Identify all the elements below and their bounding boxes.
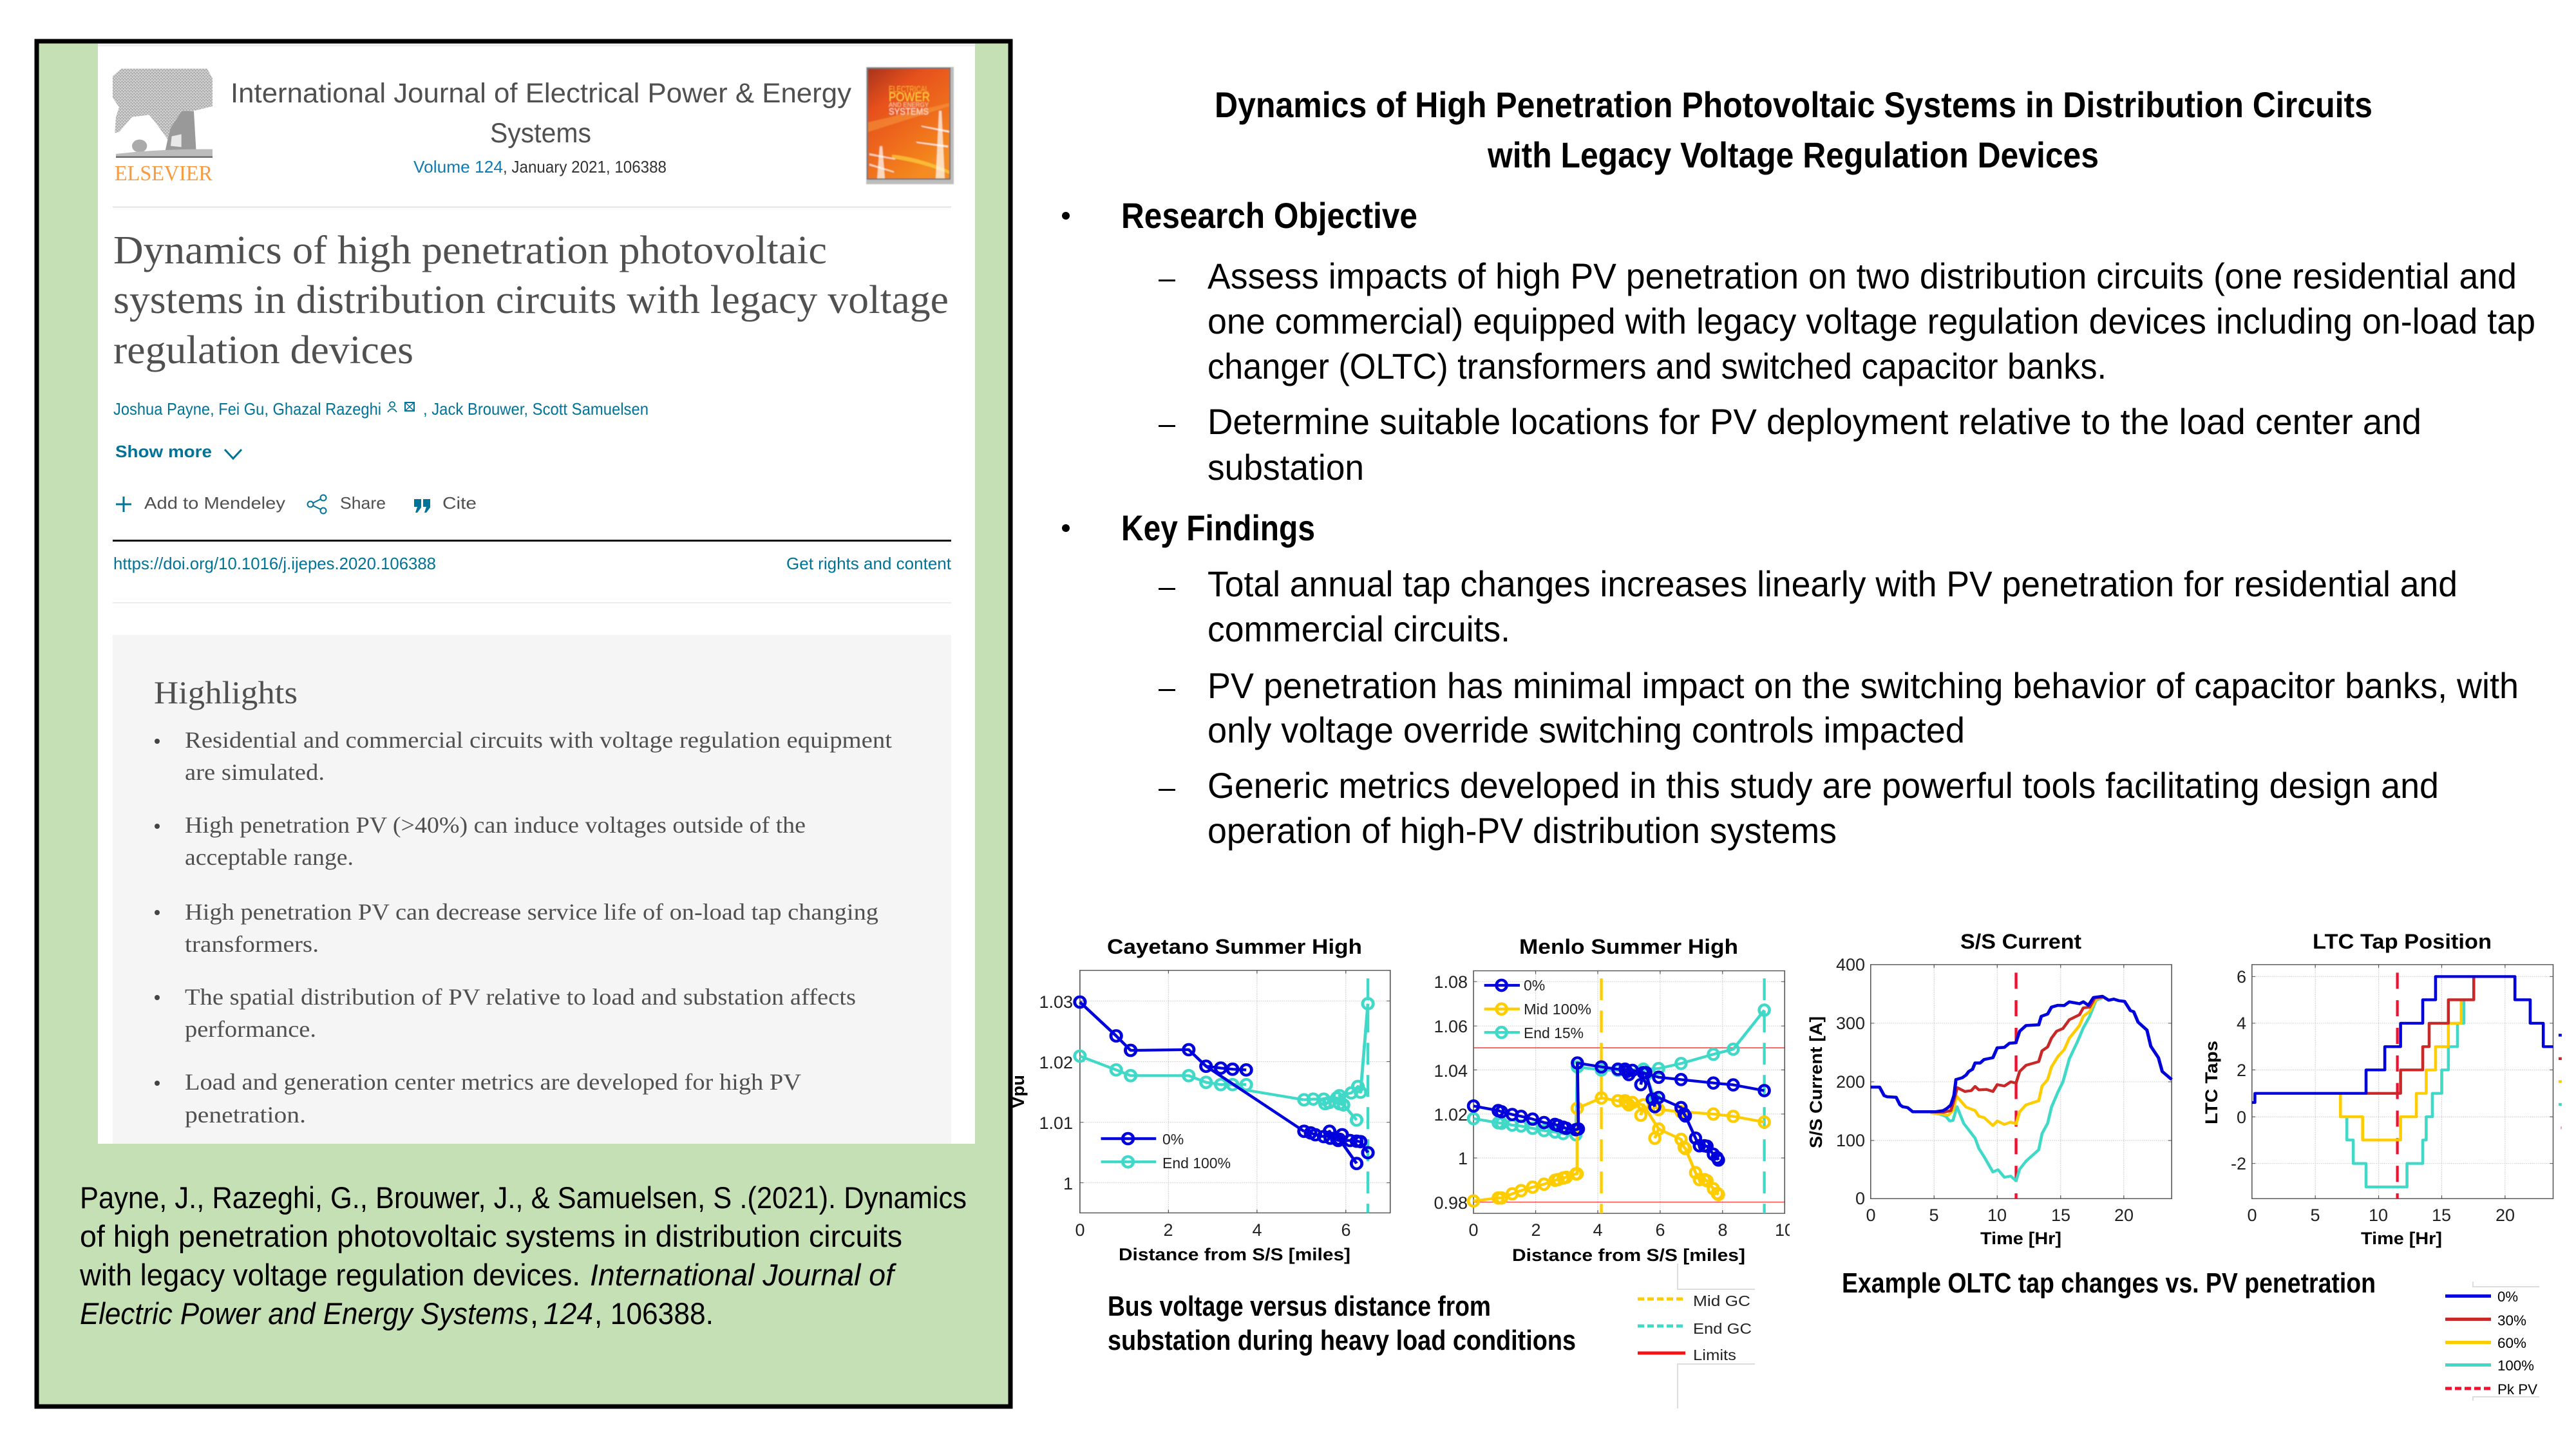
x tick labels: 20 bbox=[2114, 1206, 2134, 1225]
bullet: generic metrics bbox=[1159, 765, 2439, 851]
article actions: Share bbox=[340, 493, 386, 513]
series: End 15% bbox=[1473, 1010, 1765, 1135]
section: research objective bbox=[1062, 195, 2535, 488]
series: 30% bbox=[2366, 976, 2474, 1094]
bullet: assess impacts: one commercial) equipped with legacy voltage regulation devices including on-load tap bbox=[1208, 301, 2535, 341]
x tick labels: 15 bbox=[2432, 1206, 2451, 1225]
article title: Dynamics of high penetration photovoltaic bbox=[113, 229, 827, 272]
series: 60% bbox=[1931, 998, 2103, 1126]
citation: International Journal of bbox=[590, 1258, 897, 1292]
legend labels: End 100% bbox=[1162, 1155, 1231, 1171]
x tick labels: 0 bbox=[1468, 1220, 1479, 1240]
highlights list: are simulated. bbox=[185, 759, 325, 785]
journal name: International Journal of Electrical Power & Energy bbox=[231, 78, 852, 109]
y tick labels: 0.98 bbox=[1434, 1193, 1468, 1213]
article actions bbox=[116, 493, 477, 514]
plot area bbox=[2252, 965, 2562, 1198]
y tick labels: 1.02 bbox=[1039, 1053, 1073, 1072]
bullet: tap changes: commercial circuits. bbox=[1208, 609, 1510, 649]
doi link: https://doi.org/10.1016/j.ijepes.2020.106388 bbox=[113, 554, 436, 573]
bullet: determine locations: substation bbox=[1208, 447, 1364, 488]
y-axis label: S/S Current [A] bbox=[1806, 1016, 1826, 1148]
heading: research objective: Research Objective bbox=[1121, 195, 1417, 236]
y tick labels: 1.03 bbox=[1039, 992, 1073, 1012]
highlights list: Load and generation center metrics are developed for high PV bbox=[185, 1069, 801, 1095]
bullet: assess impacts: changer (OLTC) transformers and switched capacitor banks. bbox=[1208, 346, 2107, 386]
legend: voltage charts: Mid GC bbox=[1693, 1293, 1750, 1309]
highlights list: transformers. bbox=[185, 931, 319, 957]
caption: bus voltage bbox=[1108, 1291, 1576, 1356]
series: 60% bbox=[2340, 999, 2461, 1140]
series: 100% bbox=[2347, 999, 2464, 1187]
series: 0% bbox=[1473, 1063, 1765, 1160]
y tick labels: 0 bbox=[2237, 1108, 2246, 1127]
peak PV marker bbox=[2394, 972, 2401, 1198]
legend: OLTC charts: 0% bbox=[2497, 1289, 2518, 1305]
icon: Elsevier tree logo: ELSEVIER bbox=[115, 162, 213, 185]
y tick labels: 6 bbox=[2237, 967, 2246, 987]
bullet: tap changes: Total annual tap changes increases linearly with PV penetration for residential and bbox=[1208, 564, 2458, 604]
article title: systems in distribution circuits with legacy voltage bbox=[113, 278, 949, 322]
x tick labels: 0 bbox=[2247, 1206, 2257, 1225]
legend: OLTC charts: 30% bbox=[2497, 1312, 2526, 1329]
legend labels: 0% bbox=[1524, 977, 1545, 994]
y tick labels: -2 bbox=[2231, 1154, 2246, 1173]
x tick labels bbox=[1075, 1220, 1351, 1240]
legend: OLTC charts: 60% bbox=[2497, 1335, 2526, 1351]
caption: OLTC tap changes: Example OLTC tap changes vs. PV penetration bbox=[1842, 1267, 2376, 1299]
y tick labels bbox=[1836, 955, 1865, 1208]
highlights list bbox=[155, 727, 892, 1128]
y tick labels: 1.06 bbox=[1434, 1017, 1468, 1036]
x tick labels: 2 bbox=[1531, 1220, 1541, 1240]
main title: Dynamics of High Penetration Photovoltaic Systems in Distribution Circuits bbox=[1215, 84, 2372, 125]
highlights list: High penetration PV (>40%) can induce voltages outside of the bbox=[185, 812, 806, 838]
plot area bbox=[1473, 971, 1785, 1213]
y tick labels: 200 bbox=[1836, 1072, 1865, 1092]
journal name: Systems bbox=[490, 118, 591, 149]
icon: journal cover bbox=[866, 67, 954, 184]
y tick labels: 4 bbox=[2237, 1014, 2246, 1033]
highlights list: The spatial distribution of PV relative to load and substation affects bbox=[185, 984, 856, 1010]
legend labels bbox=[1162, 1131, 1231, 1171]
y tick labels: 1.02 bbox=[1434, 1105, 1468, 1124]
series: 0% bbox=[1871, 996, 2172, 1112]
y tick labels: 1.08 bbox=[1434, 972, 1468, 992]
highlights heading: Highlights bbox=[154, 674, 298, 710]
x tick labels: 8 bbox=[1718, 1220, 1728, 1240]
chart: S/S Current bbox=[1806, 930, 2172, 1248]
bullet: generic metrics: operation of high-PV distribution systems bbox=[1208, 810, 1837, 851]
highlights list: acceptable range. bbox=[185, 844, 354, 870]
citation: 124 bbox=[544, 1296, 593, 1331]
chart: Menlo Summer High bbox=[1434, 935, 1800, 1265]
authors: , Jack Brouwer, Scott Samuelsen bbox=[423, 399, 649, 419]
icon: Elsevier tree logo bbox=[113, 69, 213, 185]
series: Mid 100% bbox=[1473, 1098, 1765, 1201]
legend: OLTC charts bbox=[2445, 1282, 2539, 1401]
x tick labels: 5 bbox=[1929, 1206, 1939, 1225]
chart title: S/S Current bbox=[1960, 930, 2081, 953]
article title: regulation devices bbox=[113, 328, 413, 372]
main title bbox=[1215, 84, 2372, 175]
generation center markers bbox=[1602, 978, 1765, 1213]
y tick labels: 2 bbox=[2237, 1061, 2246, 1080]
y tick labels: 100 bbox=[1836, 1131, 1865, 1150]
x tick labels: 6 bbox=[1655, 1220, 1665, 1240]
legend labels: End 15% bbox=[1524, 1025, 1584, 1041]
y tick labels bbox=[1434, 972, 1468, 1213]
legend: voltage charts bbox=[1638, 1264, 1755, 1408]
chart title: Cayetano Summer High bbox=[1107, 935, 1362, 958]
x-axis label: Time [Hr] bbox=[2361, 1229, 2442, 1248]
x tick labels: 6 bbox=[1341, 1220, 1351, 1240]
y tick labels: 1.01 bbox=[1039, 1113, 1073, 1133]
x tick labels: 4 bbox=[1593, 1220, 1603, 1240]
x tick labels: 0 bbox=[1075, 1220, 1085, 1240]
x tick labels: 5 bbox=[2310, 1206, 2320, 1225]
journal name: , January 2021, 106388 bbox=[503, 157, 667, 176]
bullet: determine locations: Determine suitable locations for PV deployment relative to the load center and bbox=[1208, 401, 2421, 442]
y-axis label: LTC Taps bbox=[2202, 1041, 2221, 1124]
end generation marker bbox=[1365, 978, 1372, 1213]
citation: Payne, J., Razeghi, G., Brouwer, J., & Samuelsen, S .(2021). Dynamics bbox=[80, 1180, 967, 1215]
x tick labels: 0 bbox=[1866, 1206, 1876, 1225]
citation: with legacy voltage regulation devices. bbox=[79, 1258, 580, 1292]
x tick labels bbox=[2247, 1206, 2515, 1225]
y tick labels: 400 bbox=[1836, 955, 1865, 974]
legend labels: 0% bbox=[1162, 1131, 1184, 1148]
x tick labels: 10 bbox=[1775, 1220, 1794, 1240]
x tick labels: 4 bbox=[1252, 1220, 1262, 1240]
x tick labels: 10 bbox=[1987, 1206, 2007, 1225]
plot area bbox=[1080, 971, 1390, 1213]
clipped legend marks bbox=[2559, 1034, 2562, 1129]
x tick labels bbox=[1866, 1206, 2134, 1225]
x tick labels: 20 bbox=[2496, 1206, 2515, 1225]
series: 0% bbox=[2252, 976, 2553, 1103]
y-axis label: Vpu: Vpu bbox=[1009, 1075, 1028, 1108]
x-axis label: Time [Hr] bbox=[1980, 1229, 2061, 1248]
legend labels: Mid 100% bbox=[1524, 1001, 1591, 1018]
heading: key findings: Key Findings bbox=[1121, 507, 1315, 548]
legend: voltage charts: End GC bbox=[1693, 1320, 1752, 1337]
peak PV marker bbox=[2012, 972, 2020, 1198]
citation bbox=[79, 1180, 967, 1331]
caption: bus voltage: Bus voltage versus distance from bbox=[1108, 1291, 1491, 1322]
y tick labels bbox=[2231, 967, 2246, 1173]
highlights box bbox=[113, 635, 951, 1144]
y tick labels: 1 bbox=[1063, 1174, 1073, 1193]
legend: OLTC charts: Pk PV bbox=[2497, 1381, 2537, 1397]
article title bbox=[113, 229, 949, 372]
section: key findings bbox=[1062, 507, 2519, 851]
legend bbox=[1484, 980, 1520, 1037]
y tick labels: 1 bbox=[1458, 1149, 1468, 1168]
bullet: generic metrics: Generic metrics developed in this study are powerful tools facilitating design and bbox=[1208, 765, 2439, 806]
panel: paper reference bbox=[37, 41, 1010, 1406]
series: 30% bbox=[1931, 998, 2103, 1112]
icon: journal cover: ELECTRICAL bbox=[889, 84, 929, 94]
x tick labels: 10 bbox=[2369, 1206, 2388, 1225]
bullet: capacitor banks: PV penetration has minimal impact on the switching behavior of capacitor banks, with bbox=[1208, 665, 2519, 706]
chart title: Menlo Summer High bbox=[1519, 935, 1738, 958]
legend labels bbox=[1524, 977, 1591, 1041]
icon: journal cover: AND ENERGY bbox=[889, 102, 929, 109]
article actions: Cite bbox=[442, 493, 477, 513]
bullet: tap changes bbox=[1159, 564, 2458, 649]
show more link: Show more bbox=[115, 442, 212, 461]
y tick labels: 300 bbox=[1836, 1014, 1865, 1033]
citation: of high penetration photovoltaic systems in distribution circuits bbox=[80, 1219, 902, 1253]
y tick labels bbox=[1039, 992, 1073, 1193]
highlights list: performance. bbox=[185, 1016, 316, 1042]
series: 100% bbox=[1931, 998, 2103, 1180]
bullet: assess impacts bbox=[1159, 256, 2535, 386]
chart title: LTC Tap Position bbox=[2313, 930, 2492, 953]
legend bbox=[1101, 1133, 1156, 1167]
citation: Electric Power and Energy Systems bbox=[80, 1296, 529, 1331]
citation: , bbox=[530, 1296, 538, 1331]
chart: LTC Tap Position bbox=[2202, 930, 2562, 1248]
authors bbox=[113, 399, 649, 419]
x-axis label: Distance from S/S [miles] bbox=[1119, 1245, 1350, 1264]
series: End 100% bbox=[1080, 1004, 1368, 1120]
icon: journal cover: SYSTEMS bbox=[889, 106, 929, 117]
article screenshot bbox=[98, 44, 975, 1144]
legend: OLTC charts: 100% bbox=[2497, 1358, 2534, 1374]
y tick labels: 0 bbox=[1855, 1189, 1865, 1208]
chart: Cayetano Summer High bbox=[1039, 935, 1390, 1264]
journal name: Volume 124 bbox=[413, 157, 503, 176]
bullet: capacitor banks: only voltage override switching controls impacted bbox=[1208, 710, 1965, 750]
series: 0% bbox=[1080, 1002, 1368, 1164]
citation: , 106388. bbox=[594, 1296, 714, 1331]
x-axis label: Distance from S/S [miles] bbox=[1512, 1245, 1745, 1265]
rights link: Get rights and content bbox=[786, 554, 952, 573]
caption: bus voltage: substation during heavy load conditions bbox=[1108, 1325, 1576, 1356]
bullet: determine locations bbox=[1159, 401, 2421, 488]
highlights list: High penetration PV can decrease service life of on-load tap changing bbox=[185, 899, 878, 925]
legend: voltage charts: Limits bbox=[1693, 1347, 1736, 1363]
y tick labels: 1.04 bbox=[1434, 1061, 1468, 1081]
x tick labels: 2 bbox=[1163, 1220, 1173, 1240]
authors: Joshua Payne, Fei Gu, Ghazal Razeghi bbox=[113, 399, 381, 419]
bullet: assess impacts: Assess impacts of high PV penetration on two distribution circuits (one residential and bbox=[1208, 256, 2517, 296]
x tick labels: 15 bbox=[2051, 1206, 2070, 1225]
highlights list: Residential and commercial circuits with voltage regulation equipment bbox=[185, 727, 892, 753]
icon: journal cover: POWER bbox=[889, 91, 930, 104]
journal name bbox=[231, 78, 852, 176]
x tick labels bbox=[1468, 1220, 1794, 1240]
plot area bbox=[1871, 965, 2172, 1198]
main title: with Legacy Voltage Regulation Devices bbox=[1487, 135, 2099, 175]
article actions: Add to Mendeley bbox=[144, 493, 285, 513]
bullet: capacitor banks bbox=[1159, 665, 2519, 750]
highlights list: penetration. bbox=[185, 1102, 306, 1128]
